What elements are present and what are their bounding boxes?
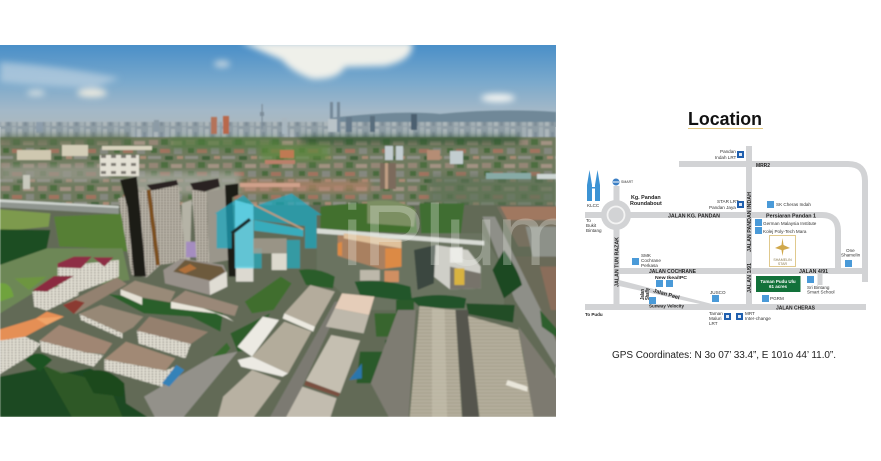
sky [0,45,556,127]
place labels: Kolej Poly-Tech Mara [763,229,807,234]
watermark lettering: iPlum [342,188,574,284]
place labels: Sri Bintang [807,285,830,290]
road labels: JALAN PANDAN INDAH [747,192,753,252]
place labels: STAR LRT [717,199,739,204]
red-roof blocks [58,260,119,293]
left tower [118,185,186,277]
road labels [585,163,828,317]
distant hills [332,110,556,122]
place labels: Inter-change [745,316,771,321]
place markers [632,201,852,304]
road map [585,146,868,326]
heading: Location [688,108,762,129]
Taman Pudu Ulu plot [756,276,800,292]
house mark [215,193,322,270]
lower photo details in zoom coordinates [0,199,561,417]
Shamelin Star site [770,236,796,266]
mid-right ground [317,233,504,310]
road labels: JALAN 4/91 [799,269,828,275]
orange-roof block [0,337,40,374]
place labels: SMK [641,253,652,258]
place labels: Indah LRT [715,155,737,160]
road labels: JALAN 1/91 [747,263,753,293]
GPS coordinates: GPS Coordinates: N 3o 07’ 33.4”, E 101o 44’ 11.0”. [612,350,836,361]
city towers [36,102,417,134]
location panel [585,108,868,361]
place labels: Perkasa [641,263,658,268]
road labels: JALAN CHERAS [776,306,815,312]
right upper greens [320,203,418,233]
midground colour zones [0,135,556,206]
place labels: Shamelin [841,252,861,258]
place labels: Smart School [807,290,835,294]
road labels: JALAN TUN RAZAK [614,237,620,287]
road labels: Roundabout [630,201,662,207]
place labels: German Malaysia Institute [763,221,817,226]
clouds [0,42,515,102]
place labels: LRT [709,321,718,326]
place labels: Taman [709,311,723,316]
road labels: Persiaran Pandan 1 [766,214,816,220]
long roofs [410,306,462,417]
place labels: MRT [745,311,755,316]
roads [585,146,868,310]
left forest [0,367,148,417]
place labels: Pandan [720,149,736,154]
road labels: MRR2 [756,163,770,169]
icon: smart tunnel: SMART [621,180,634,184]
place labels [586,149,861,326]
warehouses [284,285,335,327]
left greens [0,209,50,230]
road labels: Jalan [640,289,646,300]
road labels: Kg. Pandan [631,195,661,201]
right tower [192,188,209,263]
photo content softened [0,102,561,417]
white block [434,245,481,289]
city skyline band [0,122,556,138]
place labels: Maluri [709,316,722,321]
place labels: One [846,248,855,253]
place labels: JUSCO [710,290,726,295]
road labels: To Pudu [585,312,603,317]
icon: KLCC towers [587,170,600,208]
place labels: New Ikea/IPC [655,275,688,280]
Shamelin Star site: STAR [778,262,788,266]
icon: smart tunnel [612,178,634,186]
hedge strip [108,294,223,332]
highway [0,202,120,215]
aerial photo [0,42,574,417]
place labels: PGRM [770,296,784,301]
place labels: SK Cheras Indah [776,202,811,207]
shophouses [63,277,127,314]
orange block [338,235,401,269]
back ground of towers [182,200,192,260]
midground buildings [17,145,556,189]
road labels: Shafly [645,288,651,300]
road labels: JALAN COCHRANE [649,269,696,275]
tree belts [299,269,335,288]
podium [163,258,227,295]
roundabout [601,200,631,230]
place labels: To [586,218,591,223]
right road [482,217,561,373]
road labels: JALAN KG. PANDAN [668,214,720,220]
diagonal road [144,352,238,417]
residential towers and house mark in tower crop coordinates [118,177,322,295]
midground district [0,136,556,206]
road labels: Jalan Peel [652,288,681,302]
place labels: Cochrane [641,258,661,263]
place labels: Pandan Jaya [709,205,736,210]
Shamelin Star site: SHAMELIN [773,258,792,262]
Taman Pudu Ulu plot: Taman Pudu Ulu [760,279,796,284]
place labels: Bintang [586,228,602,233]
Taman Pudu Ulu plot: 61 acres [769,284,787,289]
icon: KLCC towers: KLCC [587,203,600,208]
place labels: Sunway Velocity [649,304,684,308]
place labels: Bukit [586,223,597,228]
transit markers [724,151,744,320]
lower ground [0,205,556,417]
